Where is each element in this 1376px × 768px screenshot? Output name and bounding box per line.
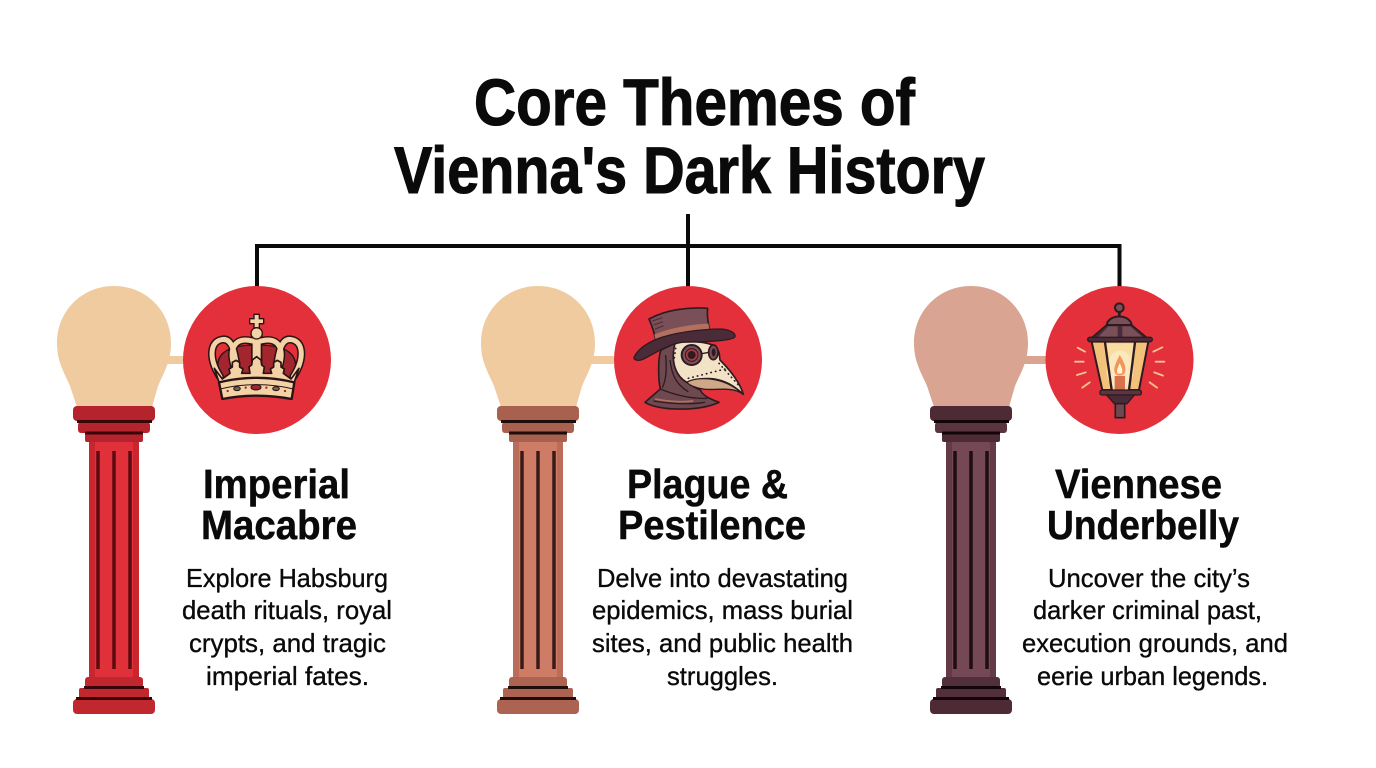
icon: royal crown	[212, 314, 301, 399]
heading: imperial macabre	[201, 461, 357, 548]
pillar: terracotta column with bulb	[481, 286, 614, 714]
text: viennese underbelly description: execution grounds, and	[1022, 628, 1288, 658]
heading: viennese underbelly: Viennese	[1055, 461, 1222, 507]
panel: viennese underbelly	[914, 286, 1288, 714]
text: imperial macabre description: crypts, and tragic	[189, 628, 386, 658]
text: plague and pestilence description	[592, 563, 853, 691]
text: viennese underbelly description: eerie urban legends.	[1037, 661, 1268, 691]
text: viennese underbelly description: darker criminal past,	[1033, 595, 1262, 625]
heading: plague and pestilence: Plague &	[627, 461, 788, 507]
title	[394, 65, 985, 207]
panel: imperial macabre	[57, 286, 392, 714]
icon: plague doctor	[634, 308, 743, 409]
text: plague and pestilence description: struggles.	[667, 661, 778, 691]
heading: plague and pestilence: Pestilence	[618, 502, 806, 548]
title: Vienna's Dark History	[394, 133, 985, 207]
text: viennese underbelly description	[1022, 563, 1288, 691]
text: imperial macabre description: imperial fates.	[206, 661, 369, 691]
text: plague and pestilence description: Delve into devastating	[597, 563, 848, 593]
connector tree	[257, 214, 1120, 288]
heading: imperial macabre: Macabre	[201, 502, 357, 548]
text: imperial macabre description: death rituals, royal	[182, 595, 392, 625]
text: plague and pestilence description: epidemics, mass burial	[592, 595, 853, 625]
panel: plague and pestilence	[481, 286, 853, 714]
text: imperial macabre description: Explore Habsburg	[186, 563, 388, 593]
icon: red circle	[183, 286, 331, 434]
icon: red circle	[1046, 286, 1194, 434]
heading: viennese underbelly	[1047, 461, 1239, 548]
heading: viennese underbelly: Underbelly	[1047, 502, 1239, 548]
text: viennese underbelly description: Uncover the city’s	[1048, 563, 1250, 593]
icon: street lantern	[1075, 303, 1164, 418]
title: Core Themes of	[474, 65, 916, 139]
heading: imperial macabre: Imperial	[203, 461, 350, 507]
pillar: dark plum column with bulb	[914, 286, 1047, 714]
text: plague and pestilence description: sites, and public health	[592, 628, 853, 658]
icon: red circle	[614, 286, 762, 434]
text: imperial macabre description	[182, 563, 392, 691]
pillar: red column with bulb	[57, 286, 190, 714]
heading: plague and pestilence	[618, 461, 806, 548]
